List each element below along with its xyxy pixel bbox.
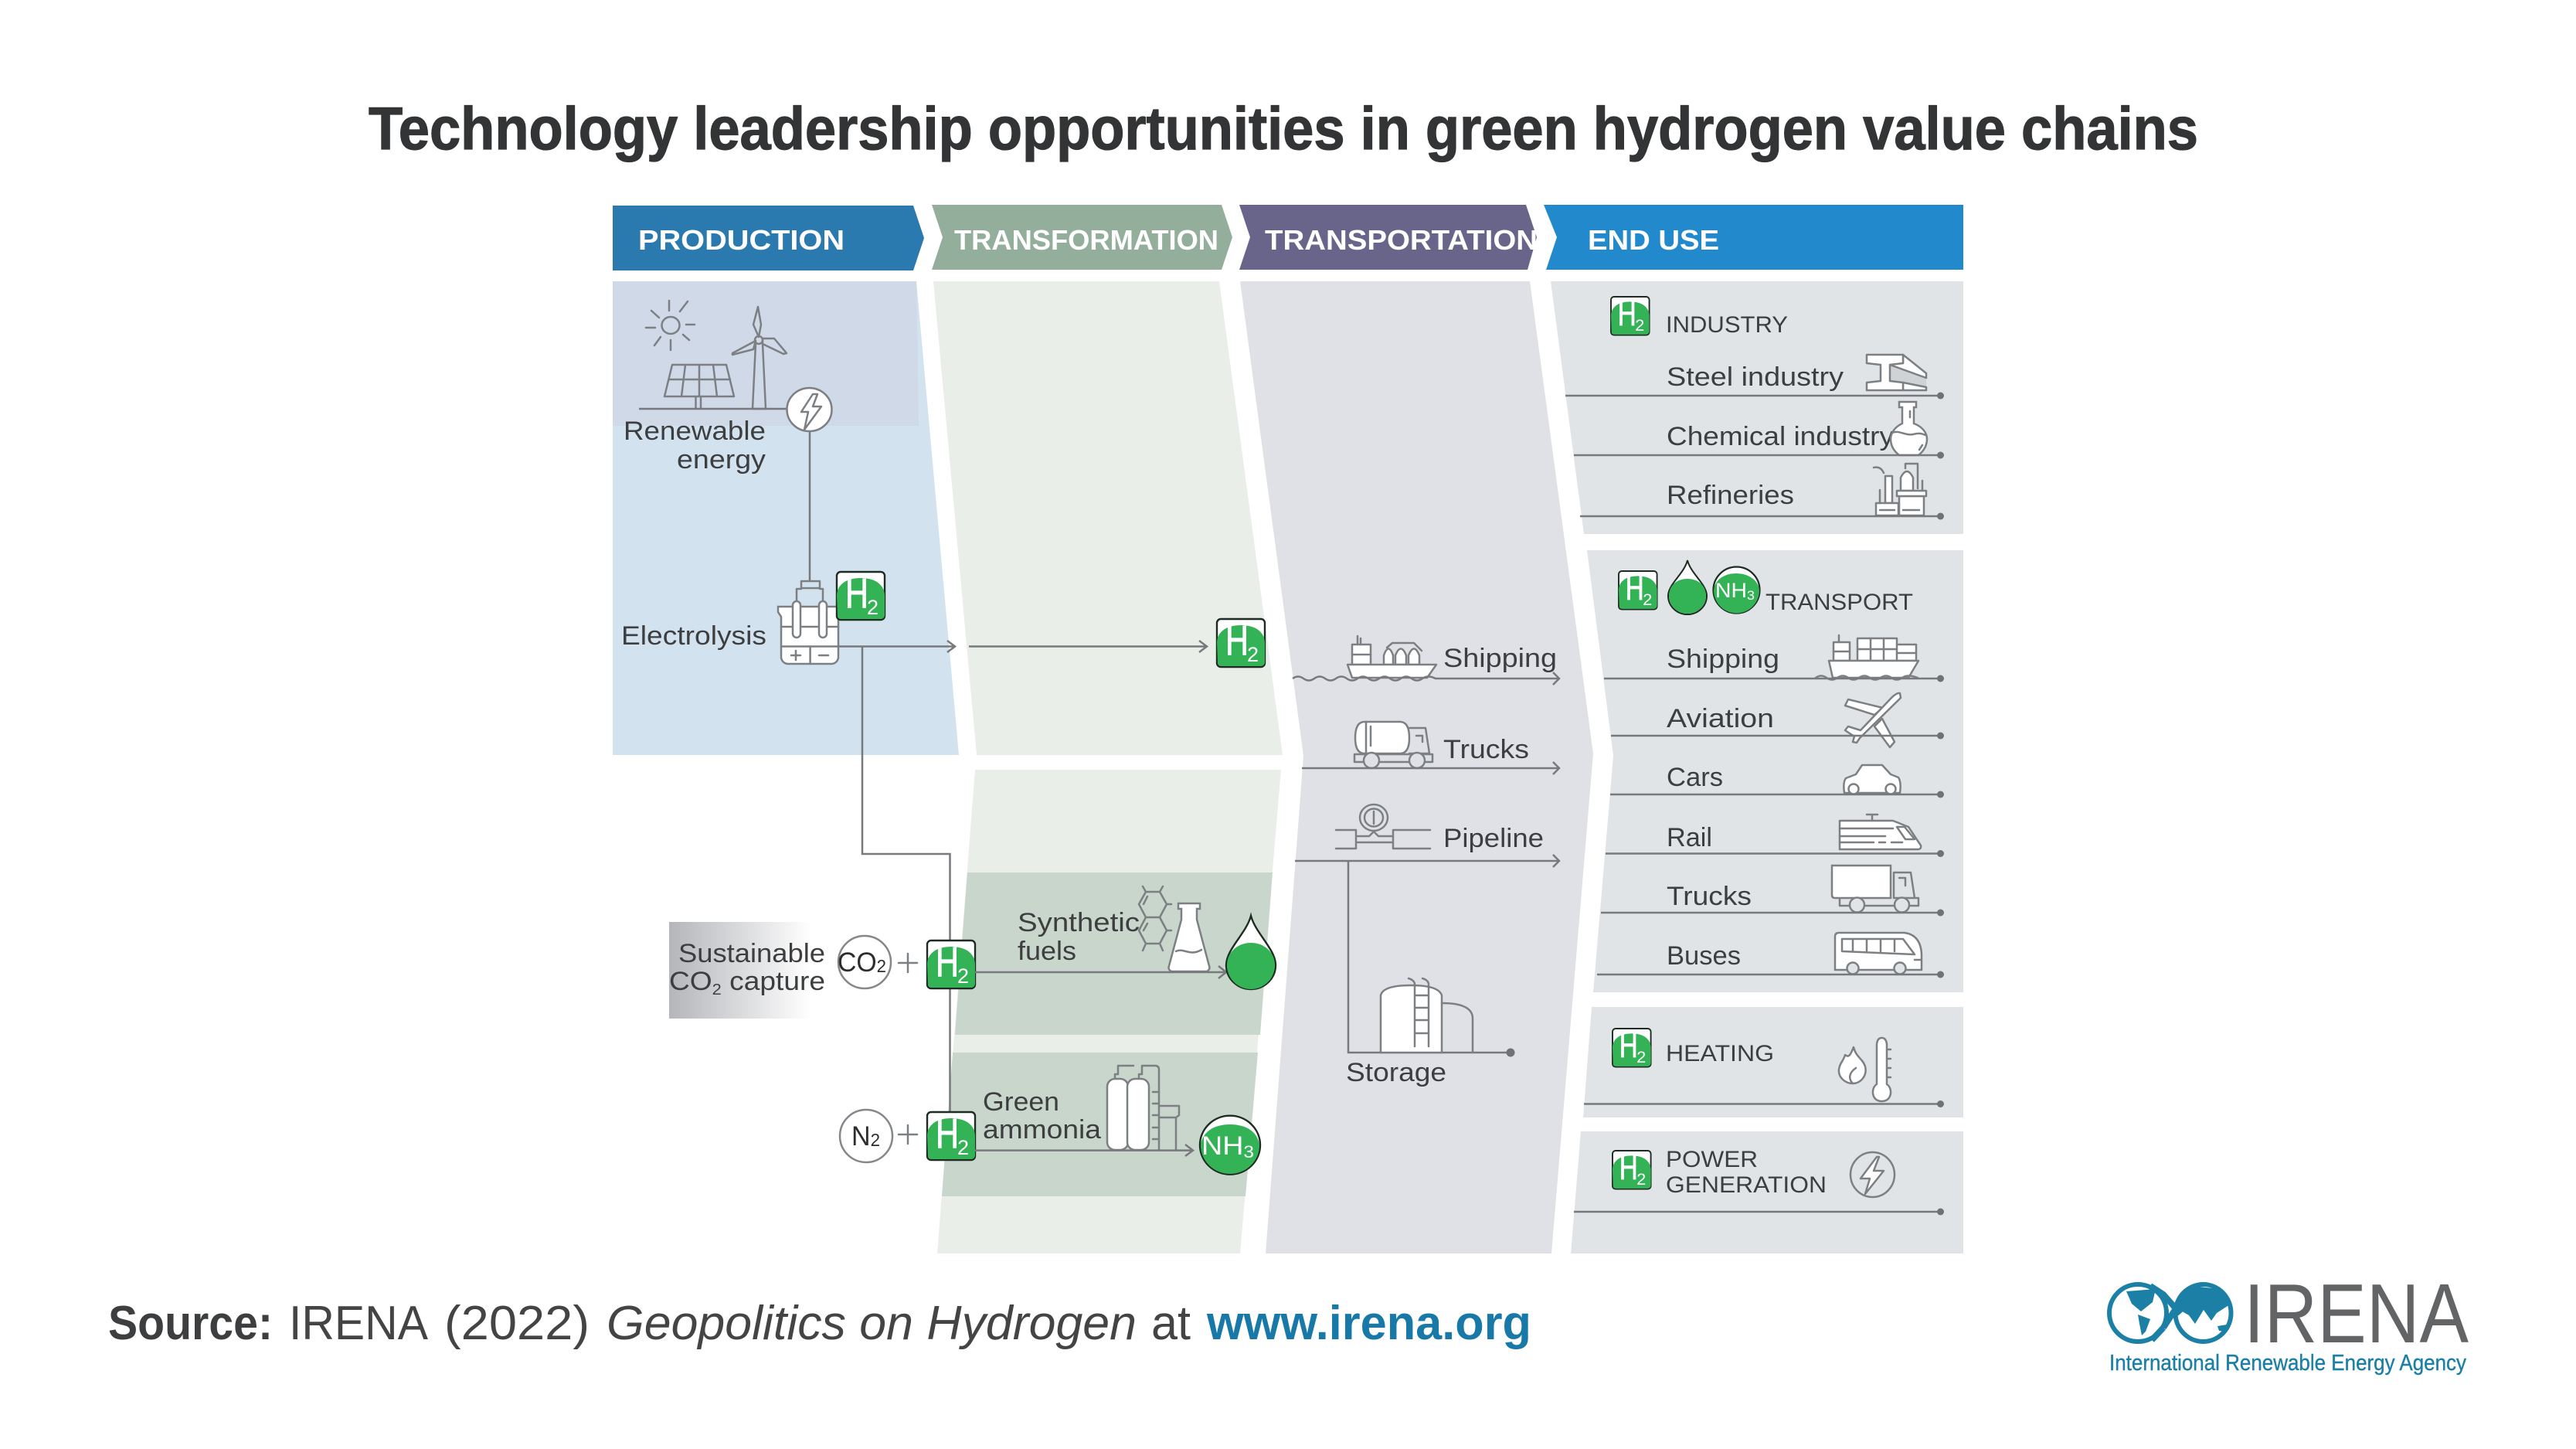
circle: CO2 (838, 936, 891, 988)
badge: H2 electrolysis (837, 570, 885, 620)
block: sustainable CO2 capture (669, 922, 825, 1019)
badge: H2 transport: 2 (1643, 590, 1652, 609)
text: green ammonia (983, 1087, 1101, 1145)
icon: fuel drop small (1668, 560, 1707, 614)
panel: end use transport (1587, 550, 1963, 992)
circle: CO2: 2 (877, 956, 886, 976)
text: synthetic fuels: Synthetic (1018, 908, 1140, 937)
row: refineries: Refineries (1667, 481, 1794, 510)
plus sign (899, 954, 917, 972)
heading: transport: TRANSPORT (1765, 590, 1913, 615)
line: power generation (1574, 1209, 1944, 1215)
header: end use: END USE (1588, 224, 1719, 256)
header: transportation: TRANSPORTATION (1265, 224, 1538, 256)
row: shipping (1604, 635, 1944, 682)
circle: N2: N (851, 1121, 871, 1151)
badge: H2 heating: H (1619, 1028, 1638, 1065)
badge: H2 power generation: H (1619, 1150, 1638, 1187)
row: cars (1610, 763, 1944, 798)
circle: N2 (840, 1110, 892, 1162)
logo: wordmark: IRENA (2244, 1267, 2469, 1361)
row: rail (1606, 815, 1944, 857)
badge: H2 heating (1613, 1028, 1651, 1067)
icon: power bolt (1850, 1152, 1895, 1197)
heading: industry: INDUSTRY (1666, 312, 1788, 338)
text: trucks: Trucks (1443, 735, 1529, 764)
logo: tagline: International Renewable Energy Agency (2109, 1351, 2466, 1376)
badge: H2 synthetic fuels: 2 (957, 964, 969, 988)
badge: H2 electrolysis: H (845, 570, 868, 617)
text: synthetic fuels (1018, 908, 1140, 966)
panel: transformation upper (933, 281, 1283, 755)
block: sustainable CO2 capture: CO (669, 967, 709, 996)
badge: H2 transport: H (1626, 570, 1644, 607)
row: steel industry (1565, 355, 1944, 399)
logo: globes (2109, 1284, 2231, 1342)
header: production: PRODUCTION (638, 224, 845, 256)
icon: ammonia tanks (1107, 1066, 1179, 1150)
icon: flame (1839, 1047, 1866, 1083)
badge: H2 synthetic fuels: H (936, 939, 959, 985)
icon: pipeline gauge (1336, 804, 1430, 849)
arrow: electrolysis to transformation edge (838, 641, 955, 652)
icon: fuel drop (1226, 916, 1276, 989)
band: green ammonia (942, 1053, 1258, 1196)
text: renewable energy: Renewable (624, 417, 766, 446)
icon: lightning circle (787, 388, 831, 431)
line: renewable energy to electrolysis (809, 431, 811, 581)
arrow: transformation to H2 (969, 641, 1207, 652)
badge: H2 transformation (1217, 617, 1265, 667)
heading: power generation (1666, 1147, 1827, 1198)
icon: NH3 small (1714, 567, 1760, 614)
plus sign (899, 1125, 917, 1144)
line: hydrogen branch (862, 646, 950, 1158)
badge: H2 green ammonia: H (936, 1111, 959, 1157)
text: synthetic fuels: fuels (1018, 937, 1076, 966)
icon: storage tanks (1381, 978, 1473, 1053)
text: shipping: Shipping (1443, 644, 1557, 673)
row: rail: Rail (1667, 823, 1712, 852)
text: storage: Storage (1346, 1058, 1446, 1087)
panel: renewable energy area (613, 281, 919, 426)
badge: H2 power generation (1613, 1150, 1651, 1189)
text: pipeline: Pipeline (1443, 824, 1544, 853)
icon: NH3 small: NH (1715, 579, 1745, 602)
panel: transportation (1240, 281, 1593, 1253)
header: production (613, 206, 924, 270)
row: cars: Cars (1667, 763, 1723, 792)
badge: H2 industry: 2 (1635, 315, 1644, 335)
row: steel industry: Steel industry (1667, 362, 1844, 392)
row: buses: Buses (1667, 941, 1741, 971)
line: heating (1584, 1100, 1944, 1107)
row: trucks: Trucks (1667, 882, 1752, 911)
header: transportation (1239, 205, 1538, 270)
row: buses (1597, 933, 1944, 978)
badge: H2 transformation: H (1225, 617, 1249, 664)
header: transformation: TRANSFORMATION (954, 224, 1218, 256)
arrow: trucks (1302, 762, 1559, 774)
row: aviation (1611, 693, 1944, 747)
circle: CO2: CO (838, 947, 878, 978)
header: transformation (932, 205, 1232, 270)
icon: NH3 small: 3 (1747, 588, 1755, 603)
row: refineries (1580, 464, 1944, 519)
source line: Source: (108, 1297, 273, 1350)
row: chemical industry (1574, 402, 1944, 459)
row: chemical industry: Chemical industry (1667, 422, 1894, 451)
text: renewable energy: energy (677, 445, 766, 474)
icon: electrolyser (778, 581, 838, 664)
badge: H2 transformation: 2 (1247, 643, 1259, 666)
icon: thermometer (1873, 1038, 1891, 1101)
source line: at (1151, 1297, 1191, 1350)
badge: H2 power generation: 2 (1636, 1169, 1646, 1189)
badge: H2 industry (1611, 296, 1650, 335)
row: trucks (1601, 866, 1944, 917)
text: green ammonia: Green (983, 1087, 1059, 1117)
panel: end use power generation (1571, 1131, 1963, 1253)
panel: transformation lower (937, 770, 1281, 1253)
IRENA logo (2109, 1267, 2469, 1376)
panel: end use industry (1551, 281, 1963, 534)
text: green ammonia: ammonia (983, 1115, 1101, 1145)
heading: power generation: GENERATION (1666, 1172, 1827, 1198)
badge: H2 synthetic fuels (927, 939, 975, 988)
arrow: pipeline (1295, 855, 1559, 867)
icon: sun (646, 301, 695, 350)
badge: H2 industry: H (1618, 296, 1636, 333)
header: end use (1544, 205, 1963, 270)
block: sustainable CO2 capture: capture (722, 967, 825, 996)
row: aviation: Aviation (1667, 704, 1774, 733)
panel: production (613, 281, 959, 755)
icon: molecule (1139, 886, 1171, 951)
arrow: to ammonia (975, 1145, 1193, 1156)
source line: www.irena.org (1206, 1297, 1531, 1350)
text: renewable energy (624, 417, 766, 474)
line: pipeline to storage (1348, 861, 1514, 1057)
arrow: to synthetic fuel (975, 966, 1226, 978)
icon: NH3 circle: NH (1201, 1131, 1239, 1161)
badge: H2 transport (1619, 570, 1657, 610)
heading: power generation: POWER (1666, 1147, 1758, 1172)
icon: tanker truck (1354, 722, 1432, 768)
source line: Geopolitics on Hydrogen (607, 1297, 1137, 1350)
panel: end use heating (1583, 1007, 1963, 1117)
block: sustainable CO2 capture: 2 (712, 981, 722, 998)
circle: N2: 2 (871, 1130, 880, 1150)
icon: NH3 circle: 3 (1243, 1142, 1254, 1162)
icon: flask (1169, 903, 1209, 971)
source line: IRENA (289, 1297, 429, 1350)
badge: H2 electrolysis: 2 (867, 596, 878, 619)
row: shipping: Shipping (1667, 645, 1779, 674)
text: electrolysis: Electrolysis (621, 621, 766, 651)
source line: (2022) (444, 1297, 590, 1350)
title: Technology leadership opportunities in green hydrogen value chains (369, 94, 2198, 162)
icon: solar panel (664, 365, 734, 409)
band: synthetic fuels (955, 872, 1273, 1035)
icon: wind turbine (732, 307, 787, 409)
badge: H2 heating: 2 (1636, 1047, 1646, 1066)
icon: LNG ship (1347, 636, 1436, 678)
ground line (639, 408, 788, 410)
block: sustainable CO2 capture: Sustainable (678, 939, 825, 968)
badge: H2 green ammonia (927, 1111, 975, 1160)
icon: NH3 circle (1200, 1116, 1260, 1175)
badge: H2 green ammonia: 2 (957, 1136, 969, 1159)
heading: heating: HEATING (1666, 1041, 1774, 1066)
source line (108, 1297, 1531, 1350)
arrow: shipping (1293, 672, 1559, 685)
